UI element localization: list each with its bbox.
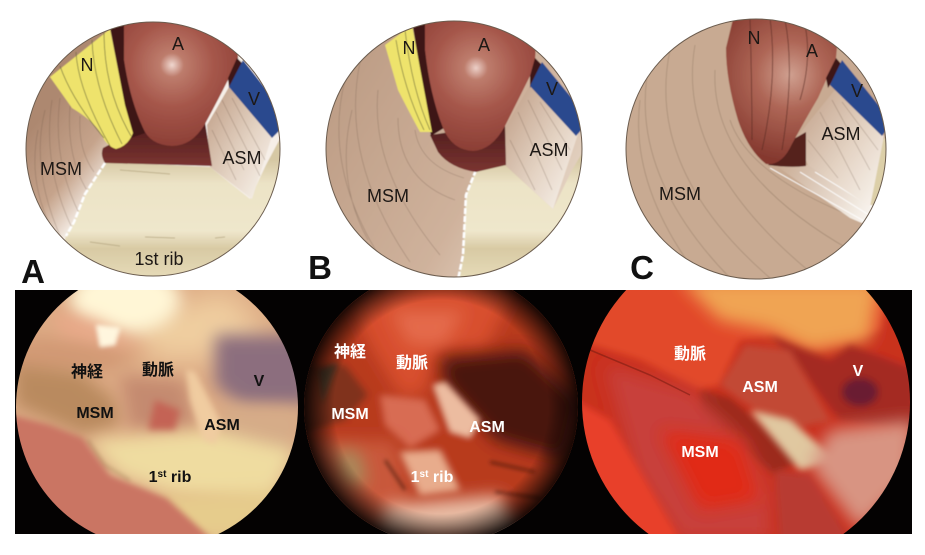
ASM (207, 87, 272, 199)
floor (430, 124, 506, 172)
label: V photo A: V (254, 373, 265, 390)
vein (830, 60, 892, 136)
heading: B: B (308, 249, 332, 286)
yellow (50, 29, 133, 149)
label: 1st rib photo B: st (420, 469, 429, 480)
label: ASM: ASM (222, 148, 262, 168)
outline: circle C (626, 19, 886, 279)
rib edge (870, 138, 886, 206)
label: artery C: 動脈 (674, 345, 706, 363)
heading: A: A (21, 253, 45, 290)
artery and nerve (726, 15, 840, 164)
label: artery B: 動脈 (396, 354, 428, 372)
label: V: V (248, 89, 260, 109)
label: A: A (172, 34, 184, 54)
label: MSM: MSM (367, 186, 409, 206)
label: MSM: MSM (40, 159, 82, 179)
outline: circle A (26, 22, 280, 276)
band (412, 24, 444, 136)
label: MSM: MSM (659, 184, 701, 204)
label: 1st rib photo B: 1 (411, 469, 420, 486)
label: MSM photo B: MSM (331, 406, 369, 423)
rib (460, 154, 582, 276)
label: N: N (80, 55, 94, 75)
label: A: A (478, 35, 490, 55)
yellow (385, 25, 432, 132)
vein (530, 62, 580, 136)
fan (784, 164, 873, 224)
band (110, 25, 145, 138)
vein (229, 60, 278, 138)
ASM (796, 86, 884, 207)
panel: black photo strip (15, 290, 912, 534)
photo: endoscopic view B (304, 290, 578, 534)
label: N: N (402, 38, 416, 58)
label: A: A (806, 41, 818, 61)
label: V photo C: V (853, 363, 864, 380)
label: V: V (851, 81, 863, 101)
artery (124, 15, 239, 146)
panel: illustration B (320, 15, 590, 285)
label: MSM photo C: MSM (681, 444, 719, 461)
label: nerve B: 神経 (334, 343, 366, 361)
label: ASM: ASM (529, 140, 569, 160)
label: nerve A: 神経 (71, 363, 103, 381)
photo: endoscopic view C (582, 290, 910, 534)
panel: illustration A (26, 22, 280, 276)
label: artery A: 動脈 (142, 361, 174, 379)
heading: C: C (630, 249, 654, 286)
outline: circle B (326, 21, 582, 277)
label: 1st rib photo B: rib (428, 469, 454, 486)
label: V: V (546, 79, 558, 99)
label: ASM photo C: ASM (742, 379, 778, 396)
label: 1st rib photo A: 1 (149, 469, 158, 486)
label: ASM photo A: ASM (204, 417, 240, 434)
ASM (512, 106, 578, 209)
rib (64, 140, 280, 276)
floor (102, 122, 212, 166)
label: ASM: ASM (821, 124, 861, 144)
panel: illustration C (620, 15, 895, 285)
label: MSM photo A: MSM (76, 405, 114, 422)
label: 1st rib photo A: st (158, 469, 167, 480)
label: N: N (748, 28, 760, 48)
floor (768, 132, 806, 167)
label: 1st rib photo A: rib (166, 469, 192, 486)
photo: endoscopic view A (16, 290, 910, 534)
label: ASM photo B: ASM (469, 419, 505, 436)
artery (425, 15, 538, 151)
label: 1st rib: 1st rib (134, 249, 184, 269)
